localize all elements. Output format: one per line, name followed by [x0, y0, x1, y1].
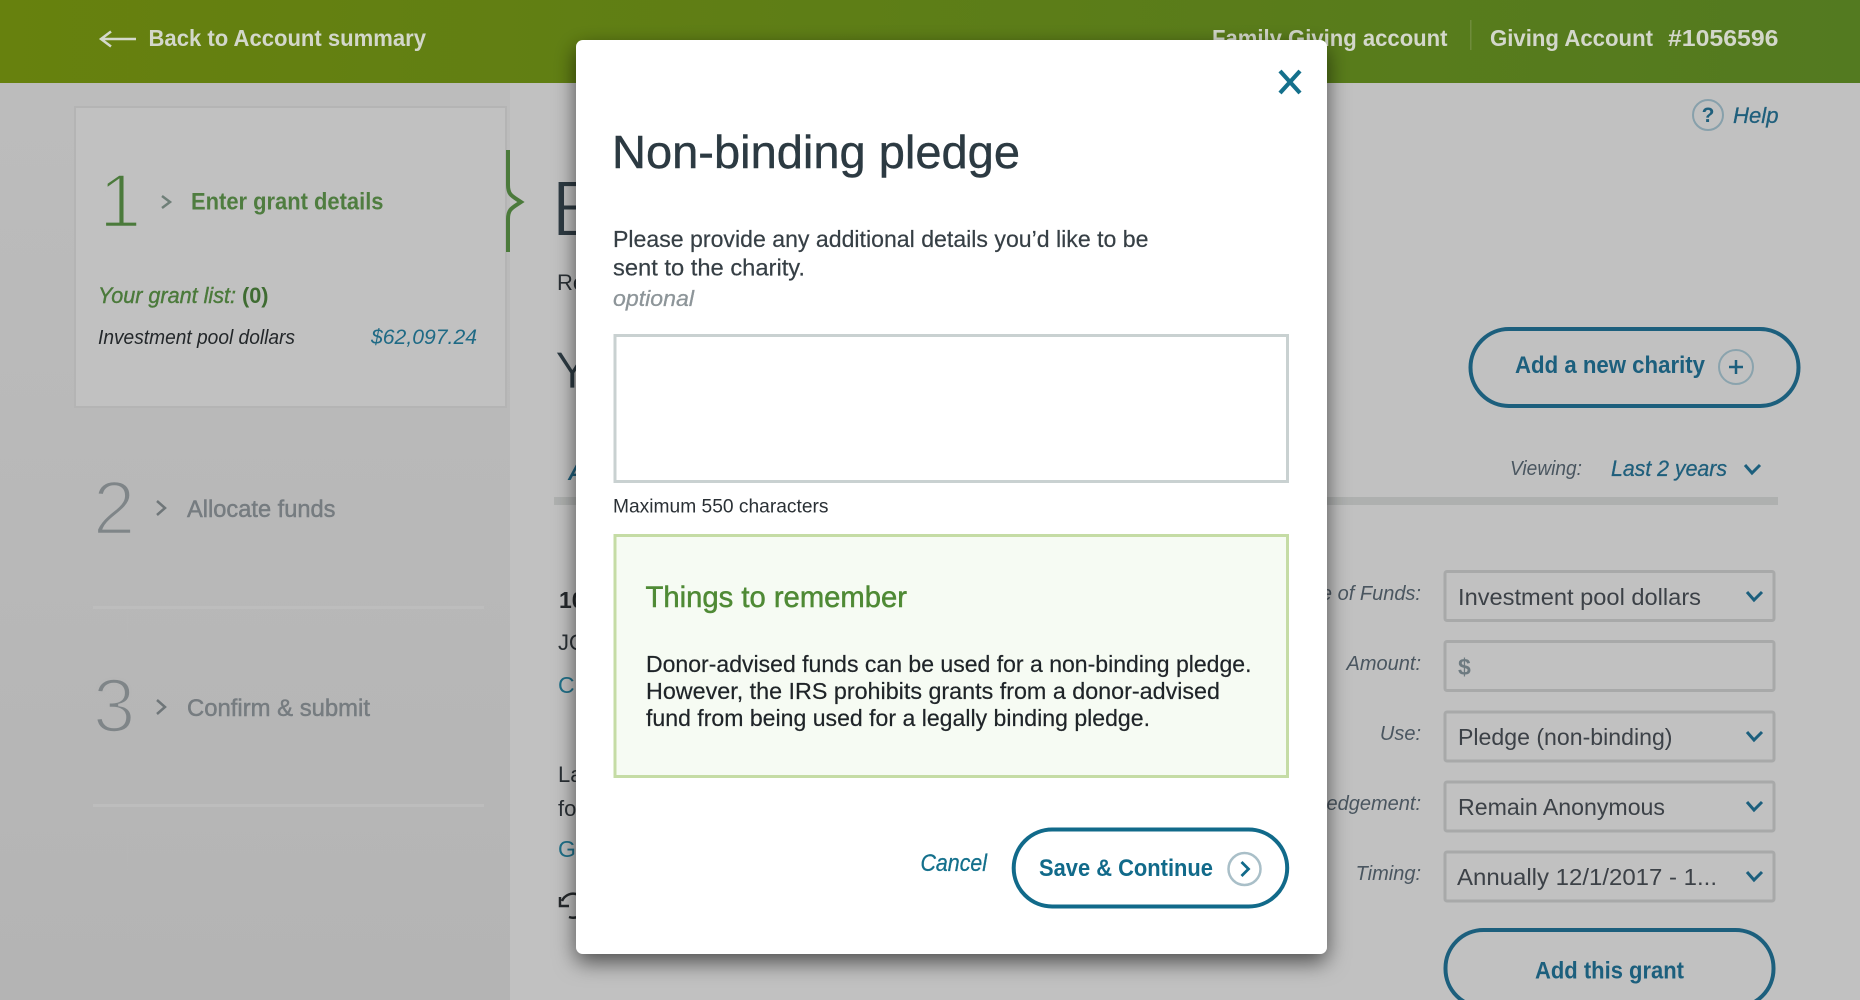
- field: use: Use:: [1380, 723, 1421, 745]
- field: acknowledgement: [1251, 782, 1774, 831]
- icon: step brace: [508, 150, 521, 252]
- main content behind modal: JO: [558, 630, 586, 655]
- instructions: Please provide any additional details you’d like to be: [613, 226, 1148, 252]
- field: timing: Annually 12/1/2017 - 1...: [1457, 864, 1717, 890]
- icon: chevron: [162, 196, 170, 208]
- grant list count: (0): [242, 283, 268, 308]
- back link: Back to Account summary: [148, 25, 426, 51]
- callout body: [646, 651, 1252, 731]
- text area: [615, 336, 1288, 482]
- fund name: Investment pool dollars: [98, 326, 295, 349]
- callout body: However, the IRS prohibits grants from a donor-advised: [646, 678, 1220, 704]
- button: add a new charity: Add a new charity: [1515, 352, 1705, 379]
- help link: [1693, 100, 1778, 130]
- step 3: [93, 664, 370, 749]
- instructions: sent to the charity.: [613, 254, 805, 280]
- account name: Giving Account: [1490, 25, 1653, 51]
- field: amount: [1346, 642, 1774, 690]
- viewing filter: Viewing:: [1510, 457, 1582, 480]
- help link: ?: [1702, 104, 1714, 127]
- main content behind modal: Gi: [558, 836, 581, 862]
- step 3: Confirm & submit: [187, 695, 370, 722]
- header bar: [0, 0, 1860, 83]
- panel: active step: [75, 107, 521, 407]
- main content behind modal: 10: [559, 587, 585, 613]
- main content behind modal: [551, 164, 1778, 918]
- step number 1: 1: [99, 159, 141, 244]
- button: add a new charity: [1470, 329, 1798, 406]
- button: add this grant: Add this grant: [1535, 958, 1684, 984]
- main content behind modal: Cl: [558, 672, 580, 698]
- main content behind modal: Y: [555, 342, 590, 400]
- step 2: Allocate funds: [187, 496, 336, 523]
- optional note: optional: [613, 286, 695, 311]
- cancel link: Cancel: [920, 850, 987, 877]
- instructions: [613, 226, 1148, 280]
- main content behind modal: A: [567, 460, 584, 485]
- field: use: Pledge (non-binding): [1458, 724, 1672, 750]
- help link: Help: [1733, 103, 1778, 128]
- step 3: 3: [93, 664, 135, 749]
- field: timing: Timing:: [1356, 863, 1421, 885]
- icon: close: [1280, 71, 1300, 93]
- account type: Family Giving account: [1212, 25, 1448, 51]
- viewing filter: Last 2 years: [1611, 456, 1727, 481]
- sidebar background: [0, 83, 510, 1000]
- icon: back arrow: [101, 32, 136, 46]
- button: save and continue: Save & Continue: [1039, 855, 1213, 882]
- main content behind modal: Re: [557, 270, 585, 295]
- viewing filter: [1510, 456, 1760, 481]
- callout body: fund from being used for a legally binding pledge.: [646, 705, 1150, 731]
- form: grant fields: [1251, 572, 1774, 1000]
- field: source of funds: Investment pool dollars: [1458, 584, 1701, 610]
- field: source of funds: Source of Funds:: [1269, 583, 1421, 605]
- callout: things to remember: [615, 536, 1288, 776]
- modal dialog: [576, 40, 1327, 954]
- field: timing: [1356, 852, 1774, 901]
- step 2: [93, 466, 336, 551]
- button: add this grant: [1446, 930, 1774, 1000]
- main content behind modal: La: [558, 762, 583, 787]
- fund balance: $62,097.24: [370, 325, 477, 349]
- field: source of funds: [1269, 572, 1774, 620]
- account number: #1056596: [1668, 25, 1778, 51]
- field: amount: $: [1458, 654, 1471, 680]
- callout heading: Things to remember: [646, 581, 907, 614]
- field: use: [1380, 712, 1774, 761]
- step label: Enter grant details: [191, 188, 384, 216]
- main content behind modal: fo: [558, 796, 576, 821]
- modal title: Non-binding pledge: [612, 126, 1020, 178]
- field: acknowledgement: Remain Anonymous: [1458, 794, 1665, 820]
- step 2: 2: [93, 466, 135, 551]
- field: amount: Amount:: [1346, 653, 1421, 675]
- main content behind modal: E: [551, 164, 604, 253]
- button: save and continue: [1014, 830, 1287, 906]
- grant list label: Your grant list:: [98, 283, 236, 308]
- field: acknowledgement: Acknowledgement:: [1251, 793, 1421, 815]
- callout body: Donor-advised funds can be used for a non-binding pledge.: [646, 651, 1252, 677]
- character limit: Maximum 550 characters: [613, 496, 829, 518]
